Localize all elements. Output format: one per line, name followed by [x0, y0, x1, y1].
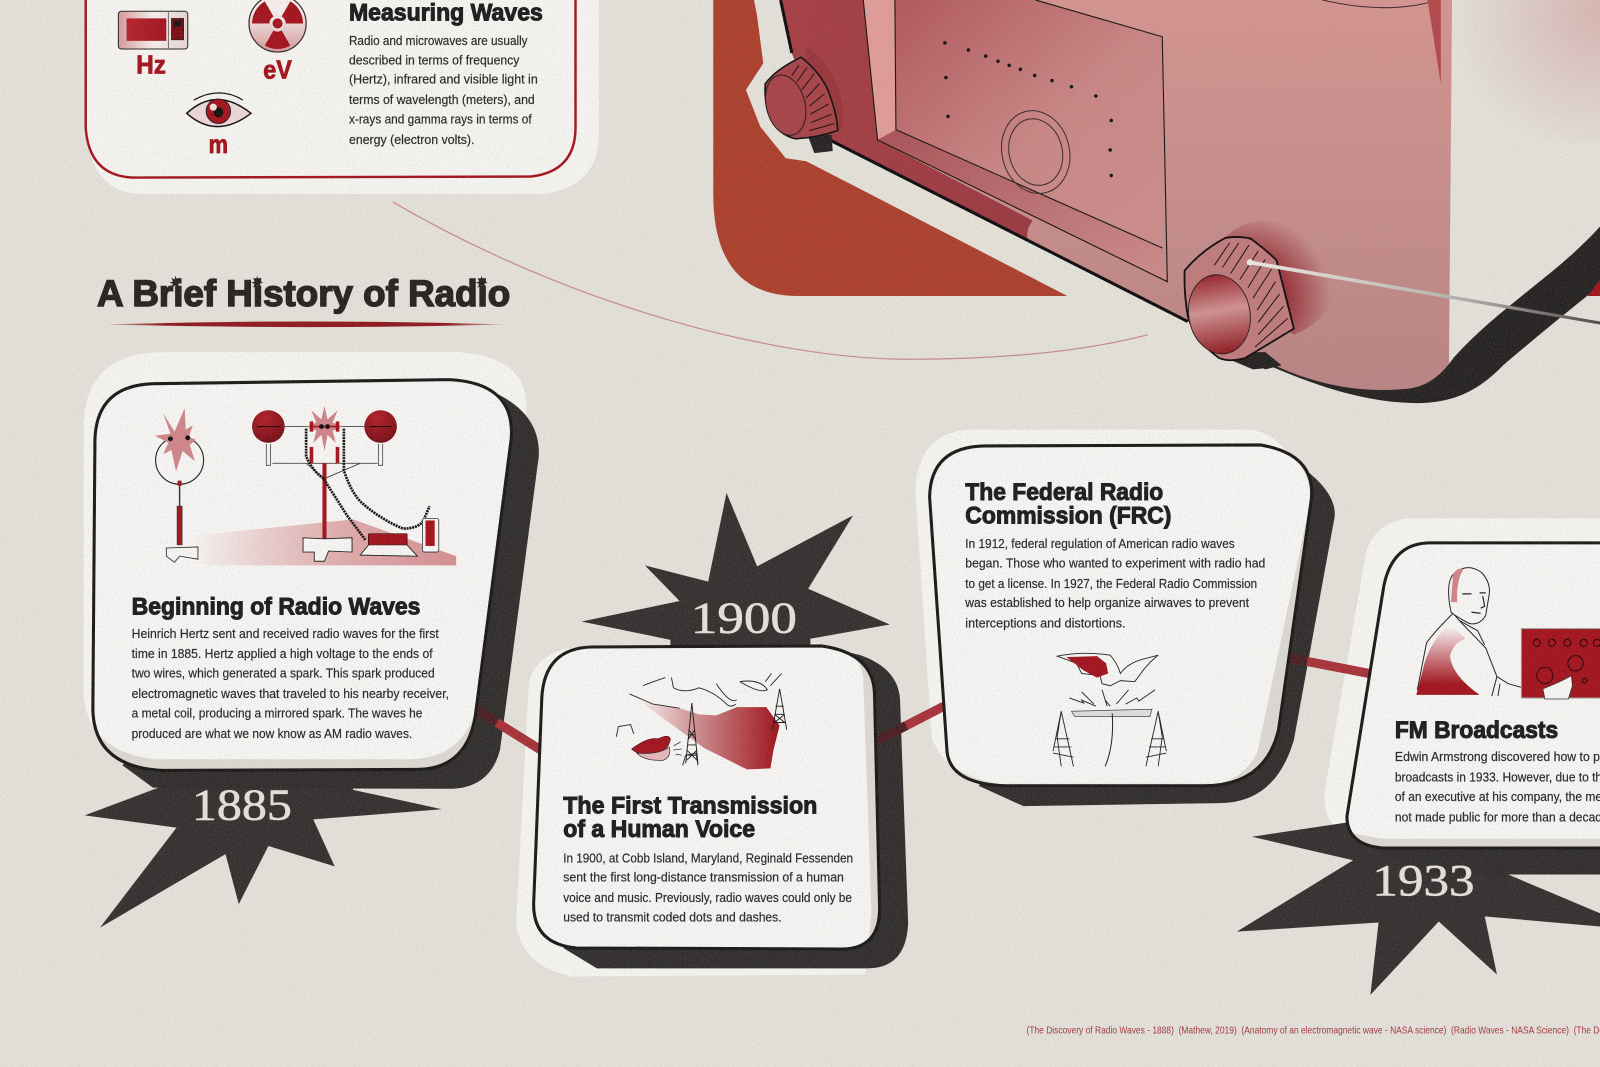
card: 1933 fm broadcasts	[1345, 541, 1600, 850]
illustration: hertz experiment	[155, 406, 456, 565]
heading	[563, 792, 817, 843]
head	[1449, 568, 1489, 624]
radio outline edge	[781, 0, 1188, 321]
control panel	[1521, 629, 1600, 698]
title underline	[106, 321, 505, 327]
map coast lines	[630, 674, 782, 708]
music note: right	[683, 753, 698, 765]
radio right side fade	[1449, 0, 1600, 143]
text: measuring waves body: terms of wavelength (meters), and	[349, 93, 535, 107]
icon: radiation	[249, 0, 306, 52]
text: measuring waves body: described in terms of frequency	[349, 53, 520, 67]
year burst 1885	[85, 765, 442, 928]
card halos	[84, 352, 1600, 977]
card: the federal radio commission	[915, 430, 1312, 786]
speaker panel lines	[863, 0, 1167, 282]
text: body: interceptions and distortions.	[965, 617, 1126, 631]
text: measuring waves body: (Hertz), infrared and visible light in	[349, 73, 538, 87]
card base	[534, 646, 880, 949]
text: measuring waves body: energy (electron volts).	[349, 133, 474, 147]
face	[1462, 593, 1486, 613]
speaker dial	[993, 103, 1079, 201]
heading	[965, 479, 1171, 530]
card: 1885 beginning of radio waves	[91, 378, 513, 772]
leader dot	[1247, 259, 1253, 266]
card base	[93, 380, 511, 770]
text: body: used to transmit coded dots and dashes.	[563, 910, 782, 924]
text: body: In 1912, federal regulation of American radio waves	[965, 537, 1235, 551]
year: 1900: 1900	[691, 593, 797, 643]
text: body: time in 1885. Hertz applied a high voltage to the ends of	[132, 647, 433, 661]
label: Hz: Hz	[136, 52, 166, 80]
speaker frame strip	[863, 0, 896, 140]
panel background	[87, 0, 599, 194]
panel: measuring waves	[86, 0, 599, 194]
lightning marks	[1069, 690, 1155, 706]
transmitter stem	[322, 463, 327, 539]
title sparks	[169, 276, 488, 288]
illustration: edwin armstrong	[1416, 568, 1600, 699]
card outline	[534, 646, 880, 949]
illustration: voice over map	[616, 674, 787, 769]
text: measuring waves body	[349, 34, 538, 147]
receiver stand	[179, 484, 181, 506]
heading: The First Transmission	[563, 792, 817, 819]
heading: The Federal Radio	[965, 479, 1163, 506]
card white interior	[915, 430, 1311, 784]
transmitter spheres	[252, 410, 285, 443]
text: measuring waves body: Radio and microwaves are usually	[349, 34, 528, 48]
heading: measuring waves: Measuring Waves	[349, 0, 543, 26]
text: body: voice and music. Previously, radio waves could only be	[563, 891, 852, 905]
hand	[1543, 676, 1572, 699]
transmitter base	[303, 538, 352, 561]
text: body	[563, 851, 853, 924]
leader line	[1249, 260, 1600, 325]
text: body: a metal coil, producing a mirrored spark. The waves he	[132, 706, 422, 720]
tower: right	[1146, 711, 1166, 766]
left knob	[759, 46, 843, 153]
heading: Commission (FRC)	[965, 502, 1171, 529]
illustration: eagle and towers	[1053, 653, 1166, 766]
card outline	[1347, 543, 1600, 848]
zigzag wires	[306, 429, 365, 540]
induction coil	[360, 544, 417, 556]
speaker holes	[943, 41, 1113, 177]
speaker frame bottom strip	[878, 130, 1167, 282]
card outline	[930, 445, 1312, 786]
eagle	[1057, 653, 1158, 686]
text: measuring waves body: x-rays and gamma rays in terms of	[349, 113, 532, 127]
text: body	[1395, 750, 1600, 824]
orange backdrop shape	[713, 0, 1067, 296]
year: 1885: 1885	[192, 779, 292, 829]
radio base shadow band	[1234, 227, 1600, 403]
icon: microwave	[118, 11, 188, 49]
heading: of a Human Voice	[563, 816, 755, 843]
map gradient	[630, 694, 780, 769]
radio illustration	[713, 0, 1600, 403]
receiver coil	[156, 436, 204, 484]
text: body: was established to help organize airwaves to prevent	[964, 596, 1249, 610]
label: m: m	[209, 131, 228, 159]
top arc line	[1322, 0, 1438, 8]
transmitter spark	[306, 406, 343, 451]
music note: left	[616, 725, 634, 737]
text: body: began. Those who wanted to experiment with radio had	[965, 556, 1265, 570]
heading: FM Broadcasts	[1395, 717, 1558, 744]
body outline	[1417, 613, 1546, 696]
text: body: electromagnetic waves that traveled to his nearby receiver,	[132, 687, 449, 701]
tower: left	[1053, 711, 1073, 766]
panel outline	[86, 0, 576, 178]
central wire	[1105, 713, 1113, 766]
text: body: produced are what we now know as AM radio waves.	[132, 727, 412, 741]
year burst 1900	[582, 493, 890, 653]
floor shadow	[193, 519, 456, 565]
receiver spark	[155, 408, 196, 471]
red tip	[1588, 280, 1600, 296]
timeline connectors	[476, 656, 1369, 750]
card base	[1347, 543, 1600, 848]
text: body: two wires, which generated a spark. This spark produced	[132, 667, 435, 681]
voice marks	[673, 742, 682, 755]
label: eV: eV	[263, 57, 292, 85]
year burst 1933	[1237, 822, 1600, 995]
title: A Brief History of Radio	[97, 273, 510, 314]
speaker panel	[895, 0, 1162, 248]
dark red wedge	[1428, 0, 1441, 84]
text: body: to get a license. In 1927, the Federal Radio Commission	[965, 577, 1257, 591]
torso	[1416, 624, 1480, 695]
card base	[930, 445, 1312, 786]
card: 1900 first transmission	[532, 644, 881, 950]
battery jar	[422, 518, 439, 552]
text: body: In 1900, at Cobb Island, Maryland, Reginald Fessenden	[563, 851, 853, 865]
antenna bar	[1071, 709, 1152, 716]
text: body	[132, 627, 449, 741]
text: body	[964, 537, 1265, 631]
eagle red wing	[1066, 656, 1108, 678]
card outline	[93, 380, 511, 770]
tower: right	[772, 689, 787, 730]
panel dials	[1533, 639, 1600, 684]
year: 1933: 1933	[1372, 855, 1474, 905]
radio dark side	[781, 0, 1033, 241]
card white interior	[535, 648, 872, 948]
heading: Beginning of Radio Waves	[132, 593, 420, 620]
card white interior	[1348, 544, 1600, 839]
tower: left	[686, 703, 698, 763]
card shadows	[122, 380, 1600, 968]
text: body: Heinrich Hertz sent and received radio waves for the first	[132, 627, 439, 641]
text: body: sent the first long-distance transmission of a human	[563, 871, 844, 885]
card white interior	[94, 381, 510, 760]
mouth	[632, 736, 670, 754]
big knob	[1182, 221, 1337, 369]
icon: eye	[187, 93, 251, 127]
arc connector	[393, 202, 1148, 359]
hair	[1451, 568, 1463, 602]
radio front face	[781, 0, 1452, 390]
